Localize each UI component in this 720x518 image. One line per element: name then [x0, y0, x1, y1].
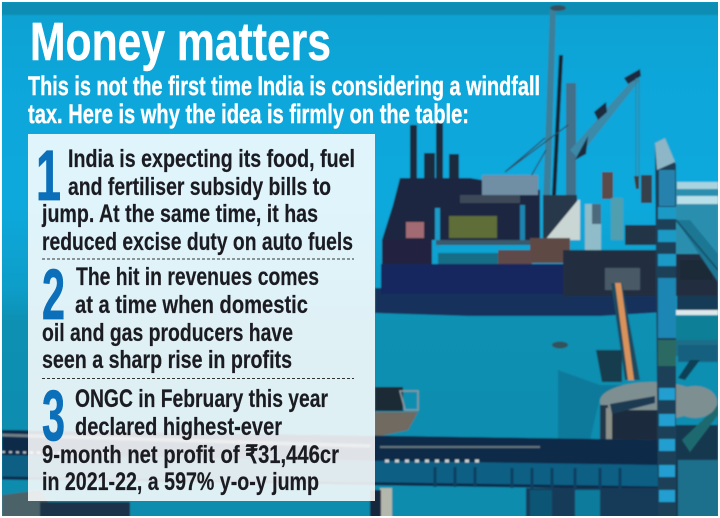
reason 2 text: The hit in revenues comes	[76, 263, 319, 291]
reason 3 text	[42, 385, 339, 496]
reason 3	[42, 377, 339, 496]
reason 2 text: oil and gas producers have	[42, 319, 293, 347]
number 2: 2	[42, 256, 65, 335]
subtitle: tax. Here is why the idea is firmly on the table:	[28, 99, 469, 129]
round platform	[598, 380, 688, 441]
water shadow under walkway	[558, 370, 621, 440]
white pilings	[584, 196, 624, 251]
reason 1 text	[41, 145, 355, 256]
reason 3 text: 9-month net profit of ₹31,446cr	[42, 441, 339, 469]
number 1: 1	[36, 137, 61, 216]
reason 1	[36, 137, 355, 256]
moored boat	[375, 387, 418, 437]
barge shadow on water	[375, 288, 665, 316]
long bridge	[2, 430, 660, 488]
barge hull	[381, 264, 563, 294]
reason 3 text: in 2021-22, a 597% y-o-y jump	[42, 468, 319, 496]
blue lattice tower	[655, 138, 676, 518]
panel: reasons	[28, 134, 375, 501]
teal building at right	[676, 182, 718, 356]
reason 2 text: at a time when domestic	[75, 291, 308, 319]
right-hand jetty block	[675, 346, 718, 516]
title: Money matters	[30, 12, 331, 72]
reason 2	[42, 256, 319, 374]
subtitle: This is not the first time India is considering a windfall	[28, 71, 540, 101]
reason 3 text: declared highest-ever	[75, 413, 282, 441]
reason 1 text: jump. At the same time, it has	[41, 200, 318, 228]
reason 1 text: and fertiliser subsidy bills to	[68, 173, 331, 201]
structures under bridge	[2, 488, 660, 518]
horizon band	[0, 2, 720, 15]
barge machinery and deck	[382, 175, 580, 265]
reason 3 text: ONGC in February this year	[75, 385, 328, 413]
reason 2 text	[42, 263, 319, 374]
barge piles	[409, 122, 653, 204]
walkway	[596, 283, 640, 382]
subtitle	[28, 71, 540, 129]
crane mast	[505, 5, 641, 205]
reason 1 text: reduced excise duty on auto fuels	[42, 228, 353, 256]
number 3: 3	[42, 377, 65, 456]
reason 1 text: India is expecting its food, fuel	[68, 145, 355, 173]
reason 2 text: seen a sharp rise in profits	[42, 346, 292, 374]
small float in the water	[552, 342, 568, 348]
deck right of barge	[563, 225, 718, 296]
